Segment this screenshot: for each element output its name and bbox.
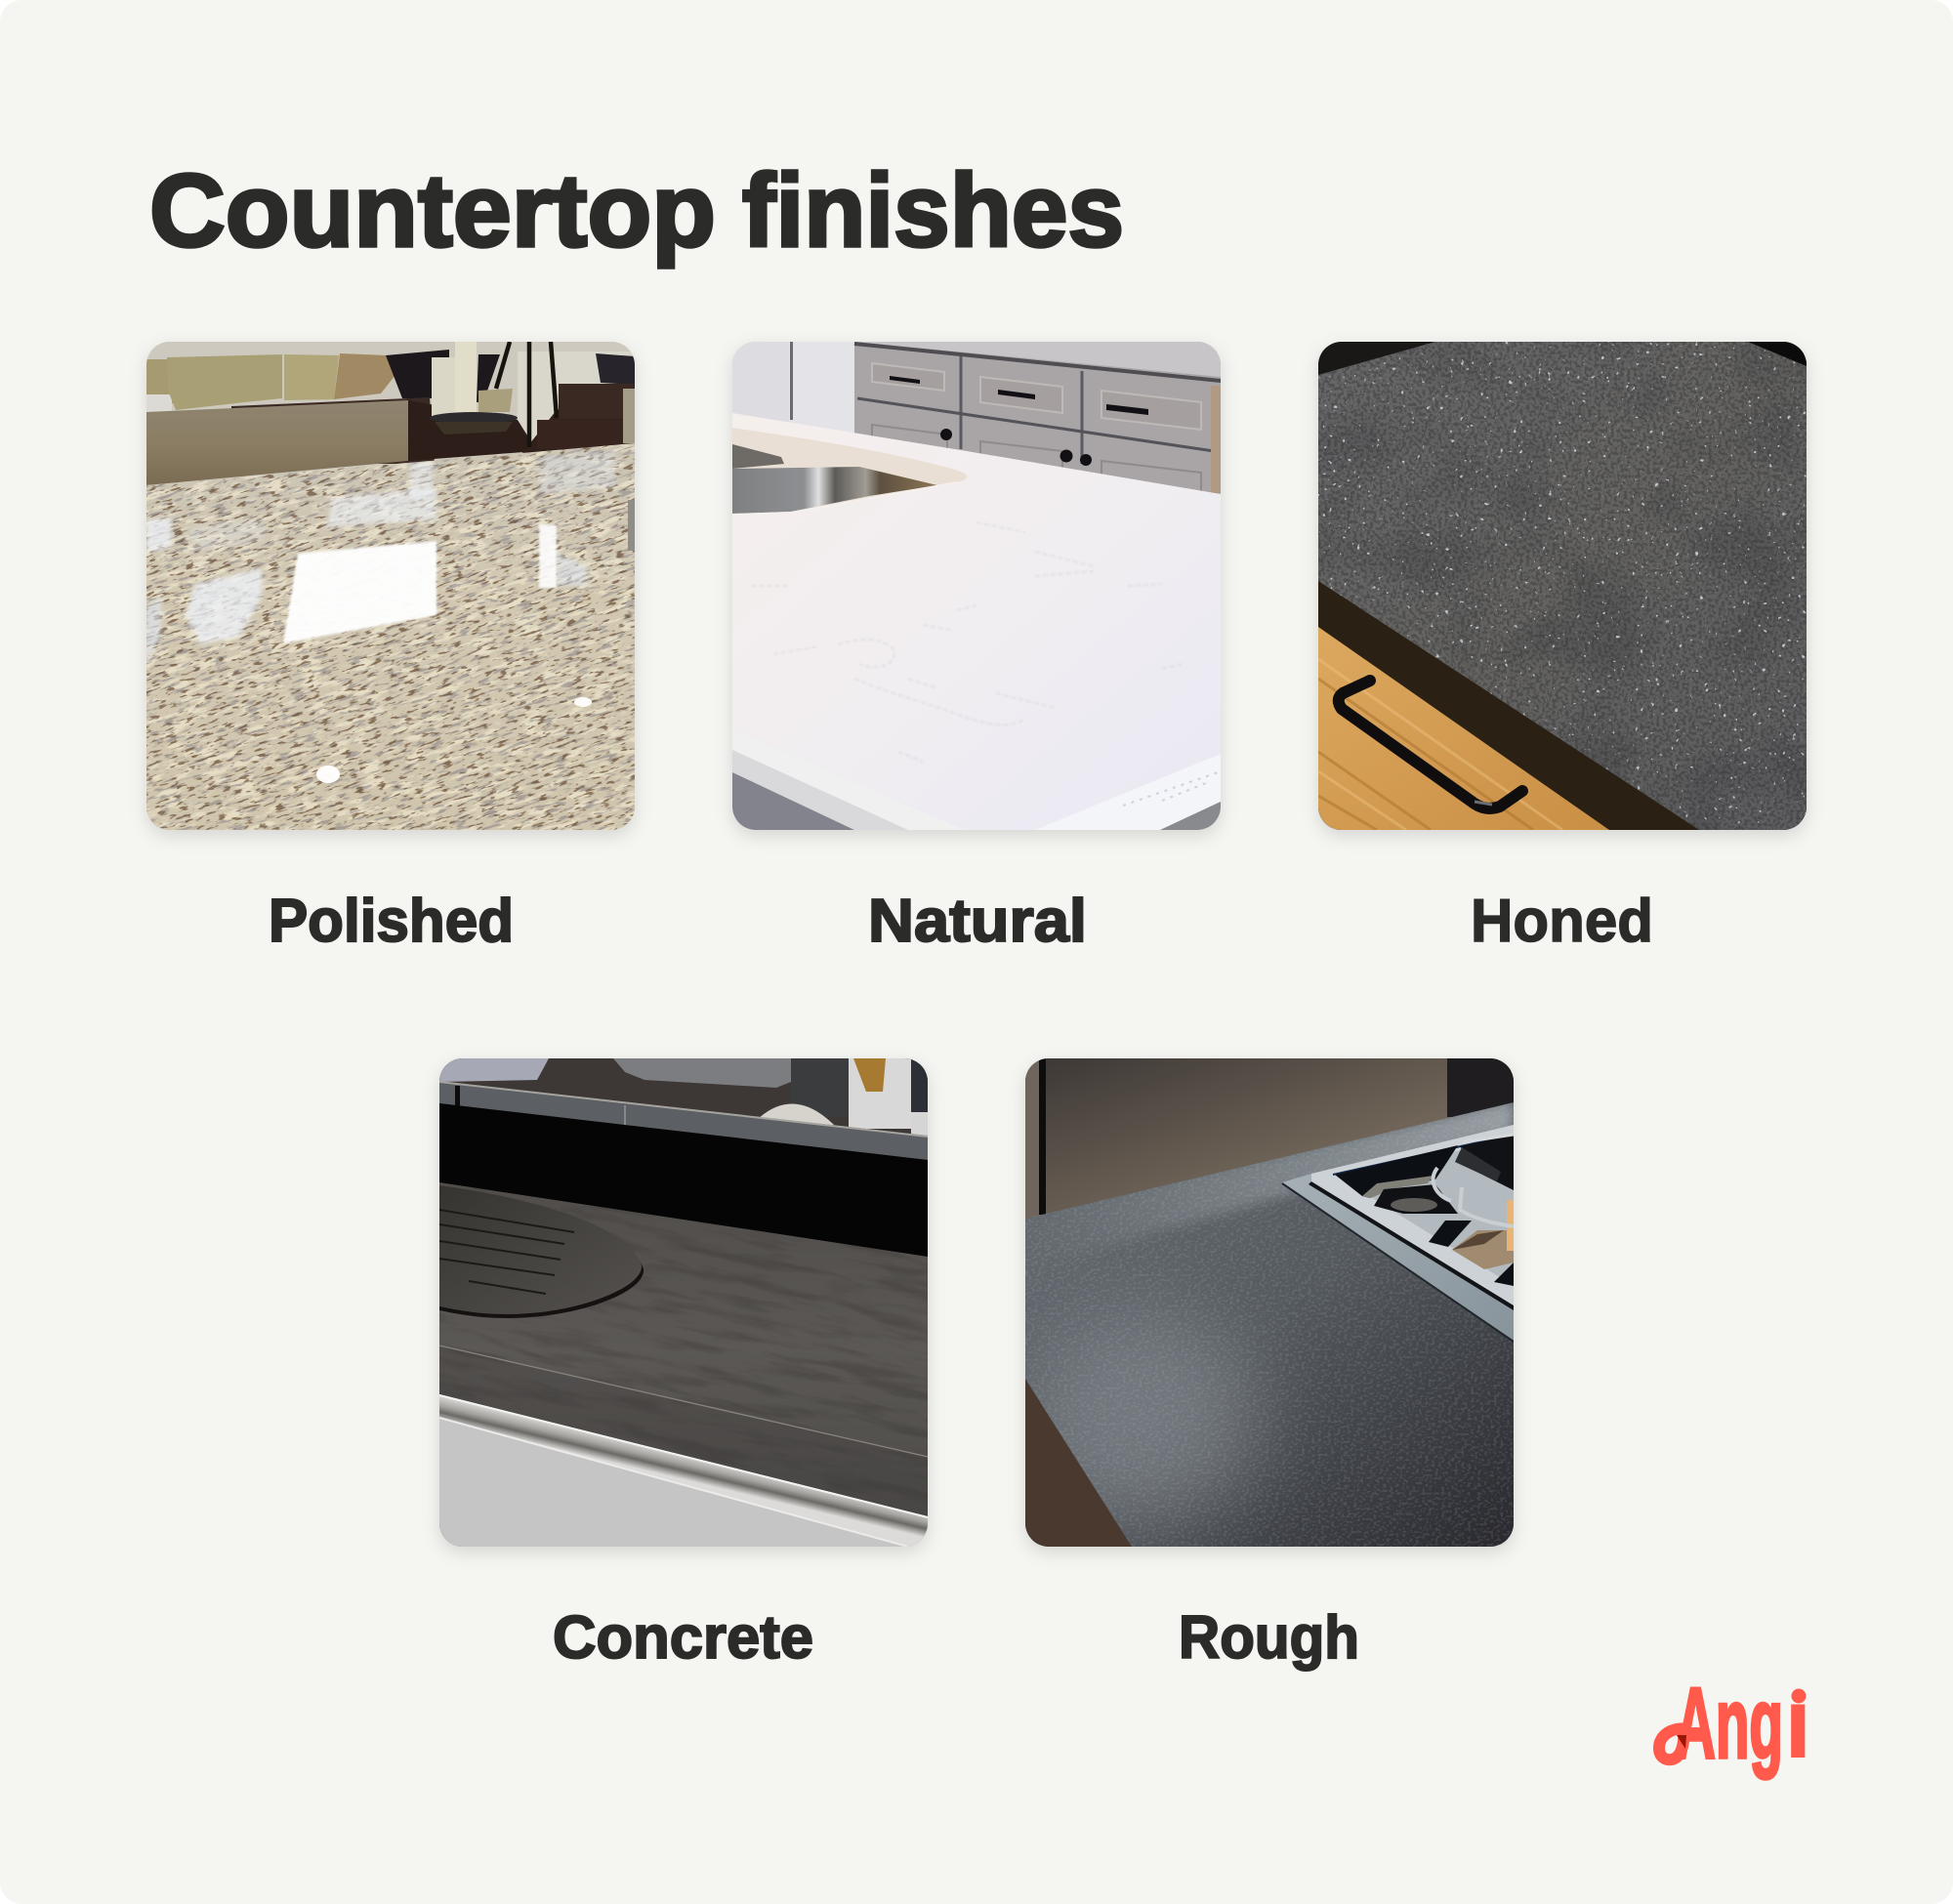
counter surface <box>732 413 1221 537</box>
panel: honed <box>1318 342 1807 830</box>
title <box>149 153 1124 269</box>
label: polished: Polished <box>269 888 514 955</box>
hob recess and grates <box>1335 1145 1458 1198</box>
reflections <box>146 451 615 783</box>
label: honed: Honed <box>1471 888 1653 955</box>
stone texture <box>1318 342 1807 830</box>
panel: rough <box>1025 1058 1514 1547</box>
panel: concrete <box>434 1058 934 1558</box>
rough surface <box>1025 1102 1514 1547</box>
title: finishes <box>742 153 1124 269</box>
photo: rough leathered countertop with gas hob <box>1025 1058 1514 1547</box>
concrete surface <box>439 1182 928 1516</box>
panel: natural <box>732 342 1221 830</box>
photo: polished granite countertop <box>146 342 635 830</box>
handles and knobs <box>890 376 1148 466</box>
label: concrete: Concrete <box>553 1604 813 1672</box>
wood drawer <box>1318 627 1609 830</box>
granite texture <box>146 443 635 830</box>
front edge <box>732 750 908 830</box>
label: rough: Rough <box>1179 1604 1359 1672</box>
hob frame <box>1311 1125 1514 1305</box>
panel: polished <box>141 342 641 842</box>
lower white trim and cabinet <box>439 1394 928 1547</box>
drain plate <box>439 1262 644 1318</box>
logo: Angi: i <box>1784 1667 1812 1779</box>
drawer handle <box>1339 681 1522 808</box>
photo: concrete countertop with drain plate <box>439 1058 928 1547</box>
cabinet details <box>857 356 1221 493</box>
photo: white natural countertop <box>732 342 1221 830</box>
hob trim <box>1282 1125 1514 1341</box>
title: Countertop <box>149 153 716 269</box>
counter edge <box>1318 581 1699 830</box>
logo: Angi: Ang <box>1676 1667 1783 1779</box>
label: natural: Natural <box>868 888 1087 955</box>
photo: dark honed countertop with drawer handle <box>1318 342 1807 830</box>
logo: Angi <box>1659 1667 1812 1779</box>
marble veining <box>752 522 1182 762</box>
